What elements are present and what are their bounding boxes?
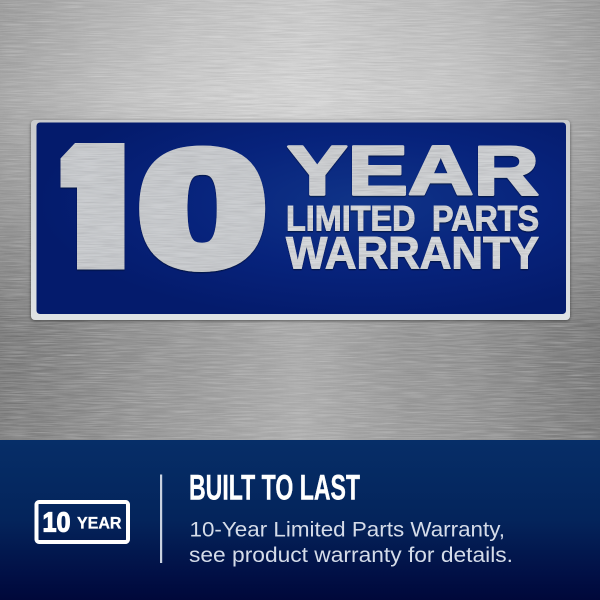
- text: warranty note: 10-Year Limited Parts Warranty,: [190, 518, 505, 542]
- text: WARRANTY: WARRANTY: [286, 228, 539, 278]
- vertical divider: [160, 474, 162, 563]
- brushed metal background: [0, 0, 600, 440]
- icon: 10 year logo: [36, 502, 128, 542]
- text: LIMITED PARTS: [286, 198, 539, 238]
- text: warranty note: see product warranty for details.: [189, 543, 513, 567]
- big number 10: 0: [138, 119, 266, 300]
- warranty badge plate: [31, 108, 570, 320]
- blue enamel panel: [36, 122, 566, 314]
- big number 10: 1: [44, 108, 140, 308]
- big number 10: [60, 143, 266, 274]
- text: LIMITED PARTS: PARTS: [432, 198, 539, 238]
- bottom banner: [0, 440, 600, 600]
- icon: 10 year logo: YEAR: [77, 514, 122, 532]
- heading: built to last: BUILT TO LAST: [189, 468, 360, 508]
- icon: 10 year logo: 10: [42, 506, 70, 538]
- text: warranty note: [189, 518, 513, 567]
- heading: YEAR: YEAR: [287, 132, 539, 210]
- text: LIMITED PARTS: LIMITED: [286, 198, 416, 238]
